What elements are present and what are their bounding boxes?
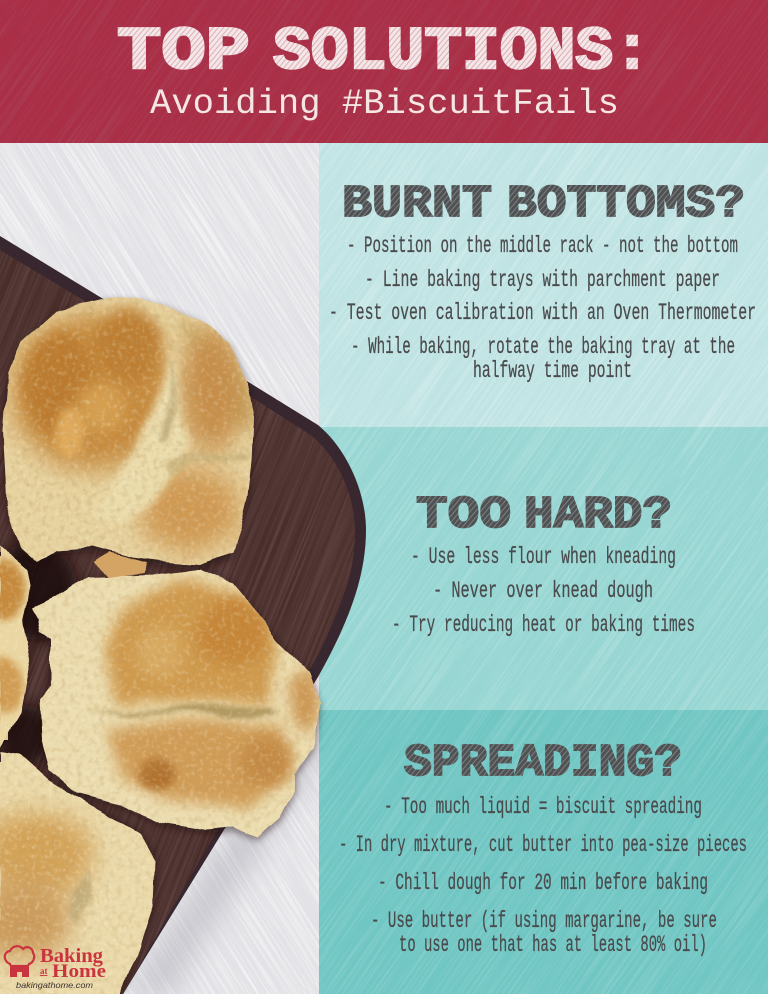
- list: burnt bottoms tips: halfway time point: [473, 358, 632, 385]
- biscuit: small crumb: [93, 553, 147, 578]
- header band: [0, 0, 768, 143]
- subtitle: Avoiding #BiscuitFails: [150, 84, 619, 124]
- heading: too hard: TOO: [416, 490, 511, 541]
- background: white painted wood: [0, 143, 319, 994]
- list: too hard tips: [392, 544, 695, 639]
- biscuit: upper: [0, 290, 260, 570]
- biscuit: left edge: [0, 546, 30, 748]
- heading: burnt bottoms: BOTTOMS?: [507, 179, 745, 230]
- logo: Baking at Home: Home: [52, 961, 106, 982]
- panel: burnt bottoms: [319, 143, 768, 427]
- icon: chef hat: [5, 946, 34, 977]
- list: too hard tips: - Never over knead dough: [433, 578, 653, 605]
- website: bakingathome.com: [16, 980, 93, 990]
- heading: burnt bottoms: [342, 179, 745, 230]
- heading: burnt bottoms: BURNT: [342, 179, 492, 230]
- list: burnt bottoms tips: [329, 233, 756, 385]
- wordmark: Baking: [40, 945, 103, 967]
- biscuit patches at frame edges: [0, 556, 118, 994]
- biscuit shadows: [0, 301, 320, 994]
- list: spreading tips: [339, 794, 747, 959]
- heading: too hard: [416, 490, 672, 541]
- heading: spreading: SPREADING?: [404, 738, 682, 789]
- logo: Baking at Home: at: [40, 966, 48, 976]
- logo: Baking at Home: [5, 945, 106, 990]
- biscuit group: [0, 290, 330, 994]
- panel: spreading: [319, 710, 768, 994]
- biscuit: middle: [245, 770, 295, 837]
- biscuit: lower left: [0, 745, 165, 994]
- panel: too hard: [319, 427, 768, 710]
- title: [117, 19, 651, 87]
- title: TOP: [117, 19, 250, 87]
- heading: too hard: HARD?: [524, 490, 672, 541]
- wooden serving board: [0, 236, 366, 994]
- title: SOLUTIONS:: [273, 19, 651, 87]
